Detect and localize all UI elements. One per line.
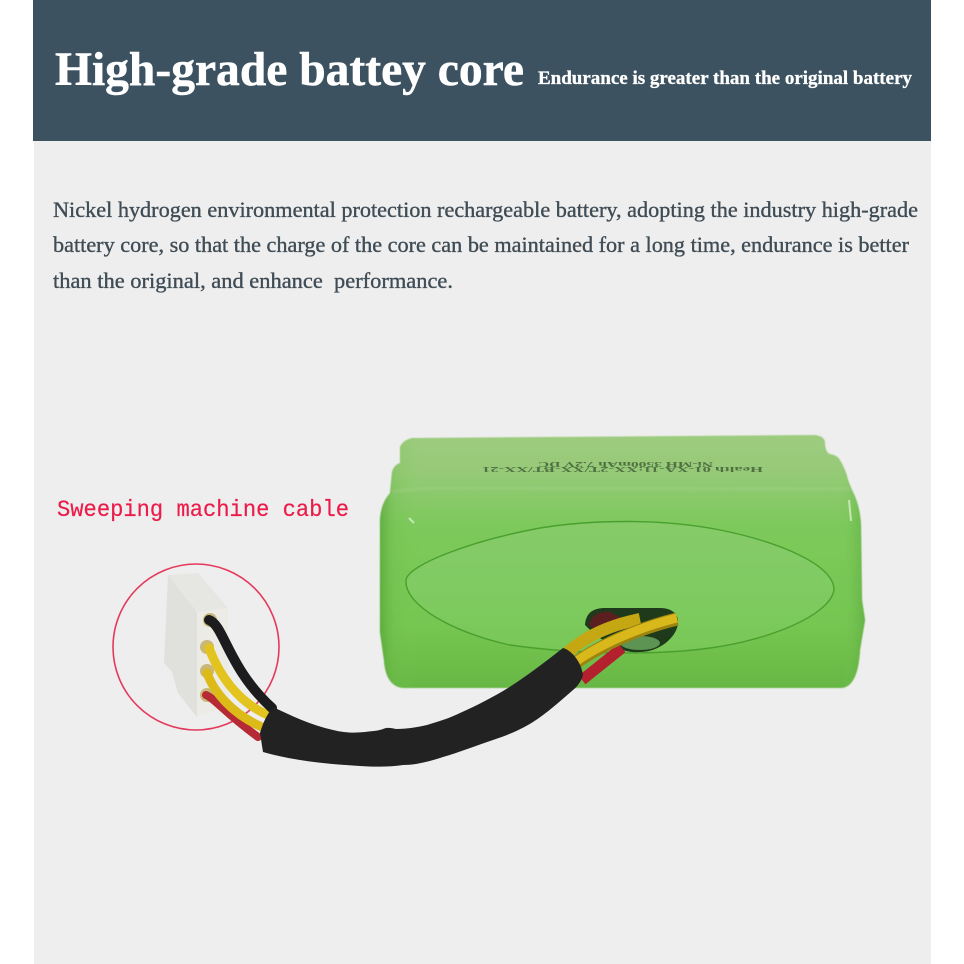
subtitle: Endurance is greater than the original battery (538, 68, 912, 89)
cable label: Sweeping machine cable (57, 497, 349, 523)
cable exit hole (585, 608, 678, 652)
highlights (409, 500, 851, 523)
body paragraph (53, 197, 918, 293)
header banner (33, 0, 931, 141)
title: High-grade battey core (55, 43, 524, 96)
body paragraph: Nickel hydrogen environmental protection rechargeable battery, adopting the industry high-grade (53, 197, 918, 222)
body paragraph: battery core, so that the charge of the core can be maintained for a long time, endurance is better (53, 232, 910, 257)
page panel background (34, 141, 931, 964)
battery wires (566, 618, 677, 680)
end cap oval (406, 522, 834, 653)
battery pack (380, 435, 865, 688)
label print on battery (481, 460, 763, 474)
connector circle (113, 564, 279, 730)
cell grooves (392, 488, 850, 492)
battery body (380, 435, 865, 688)
label print on battery: Ni-MH 3500mAh 7.2V DC (538, 460, 713, 469)
connector sockets (200, 613, 217, 702)
label print on battery: Health 01-XA-11:XX-2T/XX-BT/XX-21 (481, 465, 763, 474)
connector wires (206, 620, 272, 737)
body paragraph: than the original, and enhance performance. (53, 268, 453, 293)
white connector plug (164, 573, 228, 717)
heat-shrink cable sleeve (260, 648, 583, 767)
